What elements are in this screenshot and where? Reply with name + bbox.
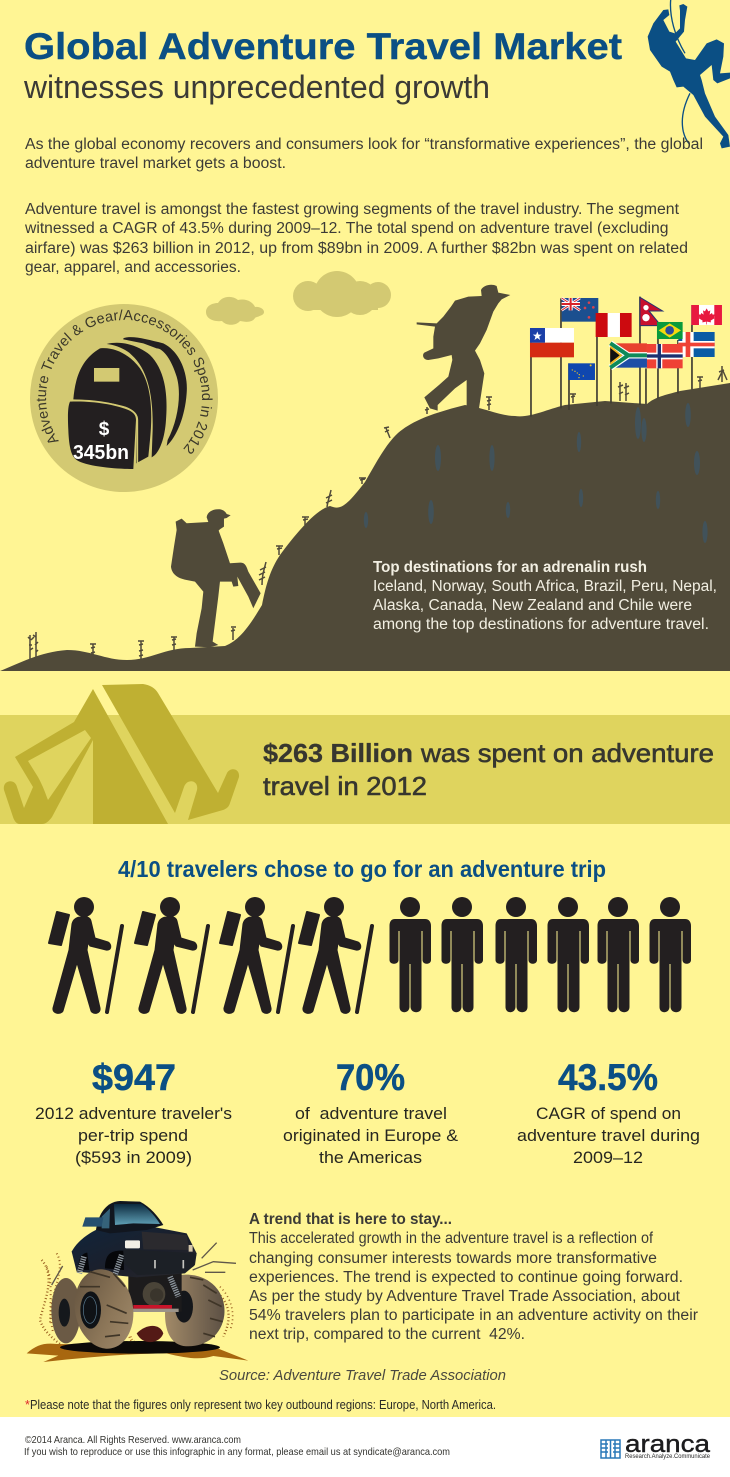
footer panel [0, 1417, 730, 1477]
flag poles [531, 297, 692, 417]
mud splatter [40, 1243, 236, 1347]
badge: gear spend 345bn backpack [30, 304, 218, 492]
flag: Chile [530, 328, 574, 357]
stat: CAGR: 2009–12 [573, 1148, 643, 1167]
illustration: monster truck [27, 1201, 248, 1362]
value: 947: $947 [92, 1057, 176, 1098]
icon: tent [4, 684, 239, 824]
front left tyre [68, 1265, 139, 1353]
icon: person 5 [598, 897, 639, 1012]
truck body [72, 1225, 197, 1277]
flag: New Zealand [562, 298, 598, 322]
footer copyright: ©2014 Aranca. All Rights Reserved. www.aranca.com [25, 1434, 241, 1446]
flag: Canada [691, 305, 722, 325]
value: 70 percent: 70% [336, 1057, 405, 1098]
stat: CAGR [517, 1057, 700, 1167]
banner text: 263 billion [263, 738, 714, 801]
footer copyright: If you wish to reproduce or use this infographic in any format, please email us at syndicate@aranca.com [24, 1446, 450, 1458]
flag: Brazil [657, 322, 683, 339]
banner text: 263 billion: travel in 2012 [263, 771, 427, 801]
text block: trend: As per the study by Adventure Travel Trade Association, about [249, 1288, 681, 1305]
stat: origin share: the Americas [319, 1148, 422, 1167]
icon: hiker 4 [299, 897, 372, 1013]
rear left tyre [51, 1278, 81, 1343]
text block: introduction: Adventure travel is amongst the fastest growing segments of the travel industry. The segment [25, 201, 680, 218]
pictogram: 4 of 10 travelers [49, 897, 691, 1013]
subtitle: witnesses unprecedented growth [23, 69, 490, 105]
shadow under truck [60, 1341, 220, 1354]
text block: introduction: airfare) was $263 billion in 2012, up from $89bn in 2009. A further $82bn was spent on related [25, 240, 688, 257]
stat: per-trip spend: ($593 in 2009) [75, 1148, 192, 1167]
logo icon [601, 1440, 620, 1458]
text block: top destinations [373, 559, 717, 633]
cab [96, 1201, 163, 1233]
badge value: $ [99, 419, 110, 440]
text block: introduction: witnessed a CAGR of 43.5% during 2009–12. The total spend on adventure travel (excluding [24, 220, 668, 237]
text block: top destinations: Iceland, Norway, South Africa, Brazil, Peru, Nepal, [373, 578, 717, 595]
text block: trend: next trip, compared to the current 42%. [249, 1326, 525, 1343]
footer copyright [24, 1434, 450, 1458]
title: Global Adventure Travel Market [24, 26, 622, 67]
hiker silhouette at the top [417, 285, 510, 411]
text block: trend: experiences. The trend is expected to continue going forward. [249, 1269, 683, 1286]
icon: rock climber on rope [648, 0, 730, 148]
stat: origin share: originated in Europe & [283, 1126, 459, 1145]
text block: introduction: gear, apparel, and accessories. [25, 259, 241, 276]
right tyre [165, 1275, 224, 1346]
trend heading: A trend that is here to stay... [249, 1211, 452, 1228]
mud on ground [27, 1344, 248, 1362]
logo: aranca: Research.Analyze.Communicate [625, 1454, 711, 1460]
icon: person 3 [496, 897, 537, 1012]
flag: Peru [596, 313, 632, 337]
stat: CAGR: CAGR of spend on [536, 1104, 681, 1123]
text block: trend: 54% travelers plan to participate in an adventure activity on their [249, 1307, 698, 1324]
stat: origin share [283, 1057, 459, 1167]
icon: hiker 2 [135, 897, 208, 1013]
badge value [73, 419, 129, 464]
icon: backpack [68, 337, 187, 469]
axle and differential [128, 1272, 182, 1312]
text block: introduction: As the global economy recovers and consumers look for “transformative experiences”, the global [25, 136, 703, 153]
flag: South Africa [610, 343, 647, 368]
heading: 4/10 travelers: 4/10 travelers chose to go for an adventure trip [118, 856, 606, 882]
hiker silhouette climbing [171, 509, 261, 647]
flag: Norway [647, 344, 683, 368]
springs [79, 1255, 178, 1297]
banner band [0, 715, 730, 824]
text block: introduction: adventure travel market gets a boost. [25, 155, 286, 172]
faint plants on the hillside [364, 403, 708, 543]
badge caption on circular path: Adventure Travel & Gear/Accessories Spend in 2012 [36, 310, 213, 454]
icon: person 2 [442, 897, 483, 1012]
headlights [125, 1240, 140, 1248]
icon: person 4 [548, 897, 589, 1012]
stat: origin share: of adventure travel [295, 1104, 447, 1123]
text block: introduction [24, 136, 703, 276]
hill silhouette [0, 383, 730, 671]
wheel arches [78, 1251, 124, 1270]
plants on the hill outline [28, 366, 727, 660]
flag: Iceland [678, 332, 715, 357]
stat: per-trip spend: per-trip spend [78, 1126, 188, 1145]
text block: trend [249, 1211, 698, 1343]
mirror [82, 1217, 103, 1227]
logo: aranca [601, 1431, 711, 1460]
icon: hiker 3 [220, 897, 293, 1013]
stat: per-trip spend: 2012 adventure traveler's [35, 1104, 232, 1123]
text block: trend: changing consumer interests towards more transformative [249, 1250, 657, 1267]
stat: per-trip spend [35, 1057, 232, 1167]
icon: person 1 [390, 897, 431, 1012]
footnote: Please note that the figures only represent two key outbound regions: Europe, North America. [30, 1398, 496, 1412]
text block: top destinations: among the top destinations for adventure travel. [373, 616, 709, 633]
badge value: 345bn [73, 442, 129, 464]
flag: Alaska [568, 363, 595, 380]
icon: person 6 [650, 897, 691, 1012]
logo: aranca: aranca [625, 1431, 711, 1458]
footnote asterisk: * [25, 1398, 30, 1412]
value: 43.5 percent: 43.5% [558, 1057, 658, 1098]
stat: CAGR: adventure travel during [517, 1126, 700, 1145]
banner text: 263 billion: $263 Billion [263, 738, 413, 768]
destinations heading: Top destinations for an adrenalin rush [373, 559, 647, 576]
flag: Nepal [640, 297, 663, 326]
grille and bumper [142, 1232, 189, 1250]
text block: trend: This accelerated growth in the adventure travel is a reflection of [249, 1230, 654, 1247]
clouds [206, 271, 391, 325]
source line: Source: Adventure Travel Trade Association [219, 1367, 506, 1384]
flags of top destinations [530, 297, 722, 417]
banner text: 263 billion: was spent on adventure [420, 738, 714, 768]
icon: hiker 1 [49, 897, 122, 1013]
text block: top destinations: Alaska, Canada, New Zealand and Chile were [373, 597, 692, 614]
